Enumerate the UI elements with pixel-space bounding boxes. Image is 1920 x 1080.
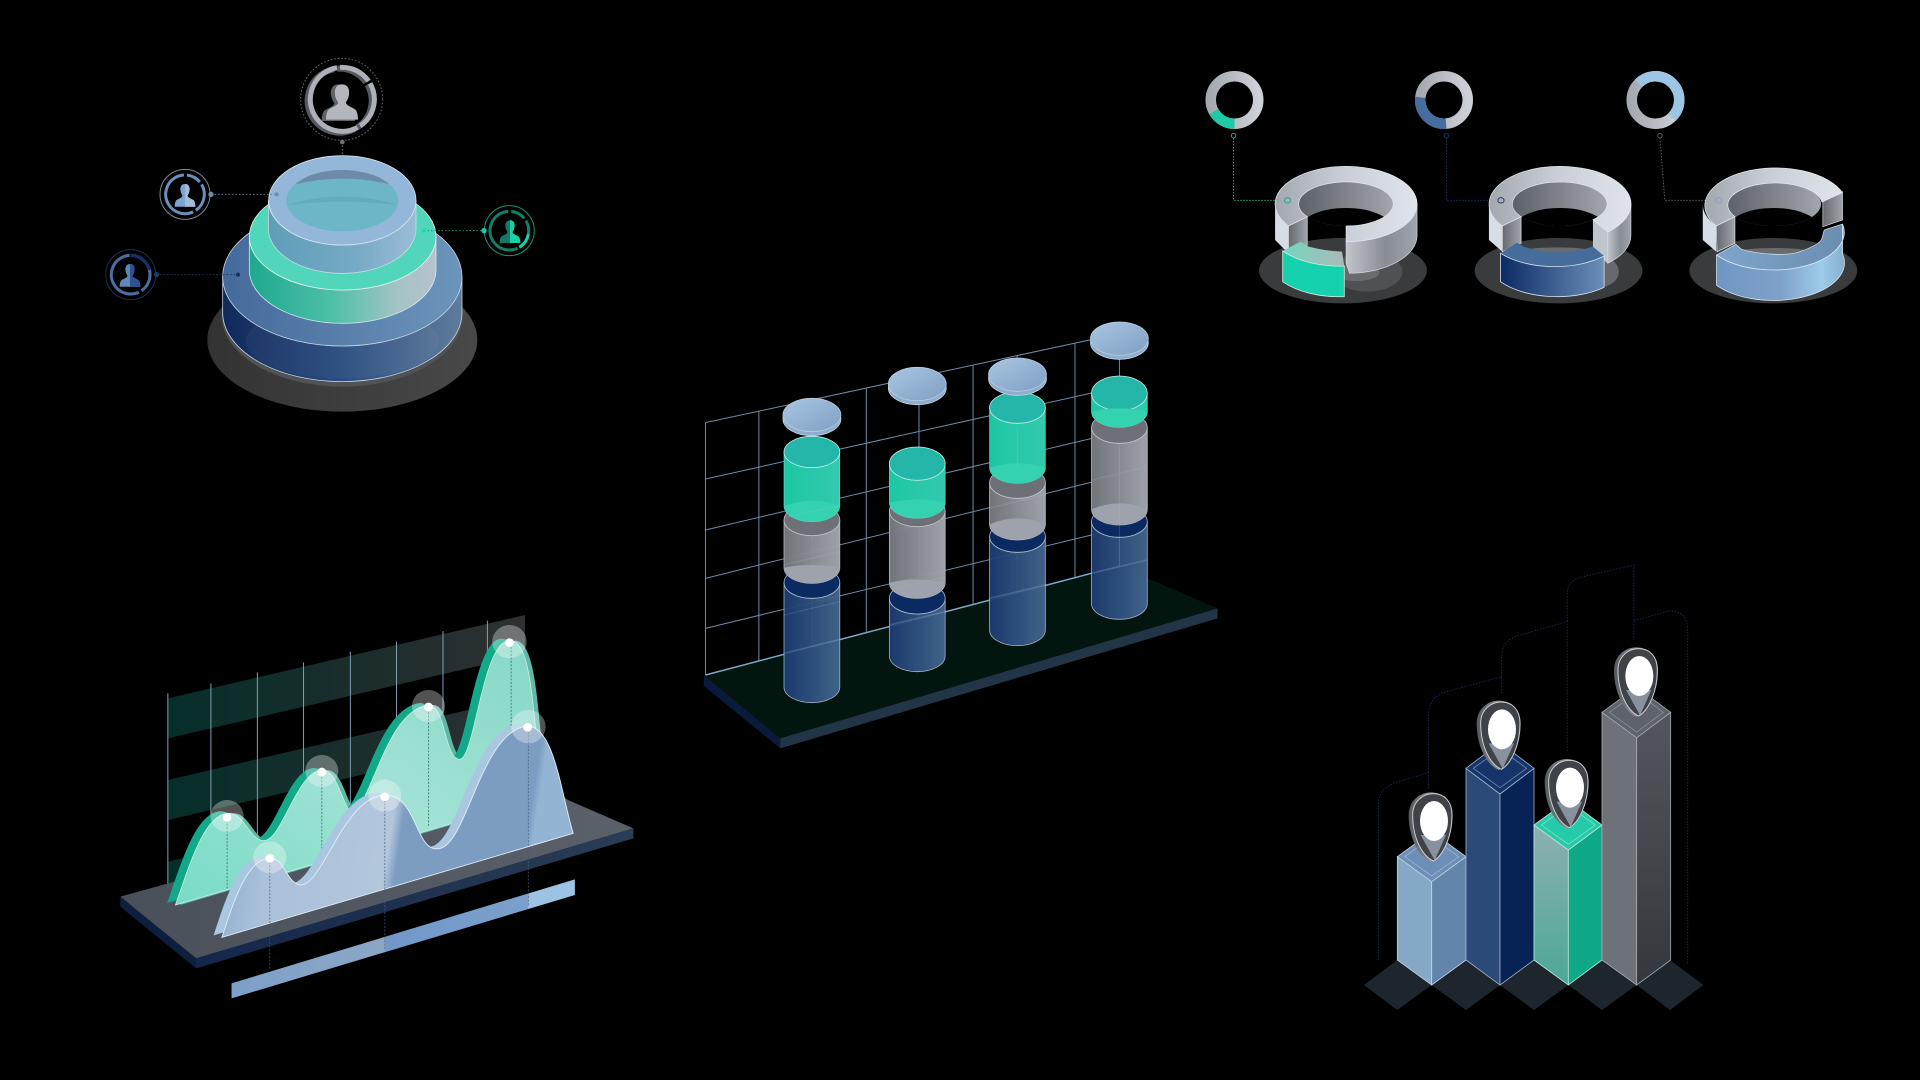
- platform base: [704, 567, 1218, 748]
- stack shadow: [207, 268, 477, 412]
- stack tier: navy base: [222, 207, 463, 387]
- icon: navy user badge: [104, 248, 240, 301]
- panel: isometric bar chart with pins: [1364, 565, 1703, 1010]
- blue area series: [214, 724, 573, 970]
- panel: donut segments: [1211, 66, 1857, 303]
- connector: blue gauge to ring: [1444, 133, 1501, 200]
- location pin 1: [1409, 792, 1453, 862]
- icon: light blue user badge: [159, 168, 279, 221]
- back grid: [705, 333, 1120, 675]
- bar 1 light blue: [1397, 832, 1466, 985]
- cylinder column 3: [989, 358, 1046, 646]
- location pin 3: [1545, 759, 1589, 828]
- floor tiles: [1364, 960, 1703, 1010]
- bar 3 teal: [1534, 800, 1602, 985]
- stack tier: light blue ring: [268, 156, 416, 273]
- ring chart 2 with navy segment: [1475, 166, 1643, 303]
- connector: light blue gauge to ring: [1658, 133, 1719, 200]
- back wall bands: [168, 615, 525, 902]
- data point halos: [211, 625, 546, 873]
- cylinder column 4: [1090, 322, 1148, 619]
- donut gauge 3: [1622, 66, 1689, 134]
- stack tier: teal middle: [249, 183, 436, 323]
- icon: teal user badge: [422, 204, 536, 257]
- donut gauge 2: [1418, 74, 1470, 126]
- panel: layered area chart: [120, 615, 633, 998]
- bar 4 grey: [1602, 687, 1671, 985]
- ring chart 1 with teal segment: [1259, 166, 1427, 303]
- dotted connectors: [1378, 565, 1688, 965]
- icon: top grey user badge: [296, 56, 386, 155]
- location pin 2: [1477, 701, 1521, 770]
- location pin 4: [1614, 647, 1658, 717]
- vertical grid lines: [168, 621, 487, 900]
- ring chart 3 with light blue segment: [1689, 168, 1857, 303]
- donut gauge 1: [1211, 76, 1258, 124]
- bar 2 navy: [1466, 743, 1534, 985]
- grid seen through the cylinders: [784, 427, 1147, 653]
- panel: layered cylinder stack with user icons: [104, 56, 536, 412]
- connector: teal gauge to ring: [1231, 133, 1287, 200]
- platform: [120, 780, 633, 968]
- cylinder column 2: [888, 367, 946, 672]
- teal area series: [167, 639, 542, 905]
- panel: stacked cylinder chart: [704, 322, 1218, 748]
- lower bar legend: [232, 879, 575, 998]
- cylinder column 1: [783, 398, 841, 703]
